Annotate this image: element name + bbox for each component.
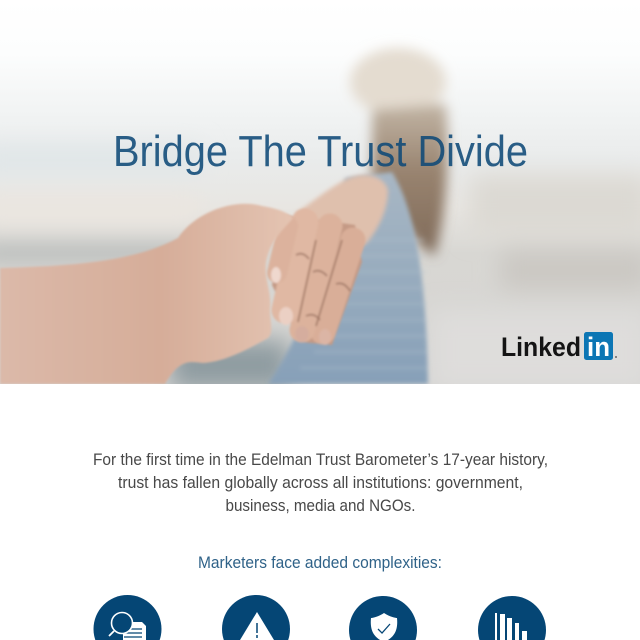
woman's hair and hat <box>350 48 448 256</box>
intro paragraph: For the first time in the Edelman Trust Barometer’s 17-year history, <box>93 450 548 469</box>
LinkedIn logo: in <box>587 332 610 362</box>
icon: bar chart <box>478 596 546 640</box>
intro paragraph: trust has fallen globally across all institutions: government, <box>118 473 523 492</box>
man's arm and hand <box>0 204 293 384</box>
title: Bridge The Trust Divide <box>113 127 528 176</box>
icon: warning triangle <box>222 595 290 640</box>
intro paragraph <box>93 450 548 515</box>
woman's forearm <box>295 175 388 250</box>
LinkedIn logo: Linked <box>501 332 581 362</box>
icon: magnifier over document <box>94 595 162 640</box>
woman's striped shirt <box>268 172 428 384</box>
hero photo: two hands holding <box>0 42 640 384</box>
blurred background scenery <box>0 145 640 390</box>
intro paragraph: business, media and NGOs. <box>226 496 416 515</box>
woman's fingers <box>271 215 362 345</box>
subheading: Marketers face added complexities: <box>198 553 442 572</box>
icon: shield with check <box>349 596 417 640</box>
